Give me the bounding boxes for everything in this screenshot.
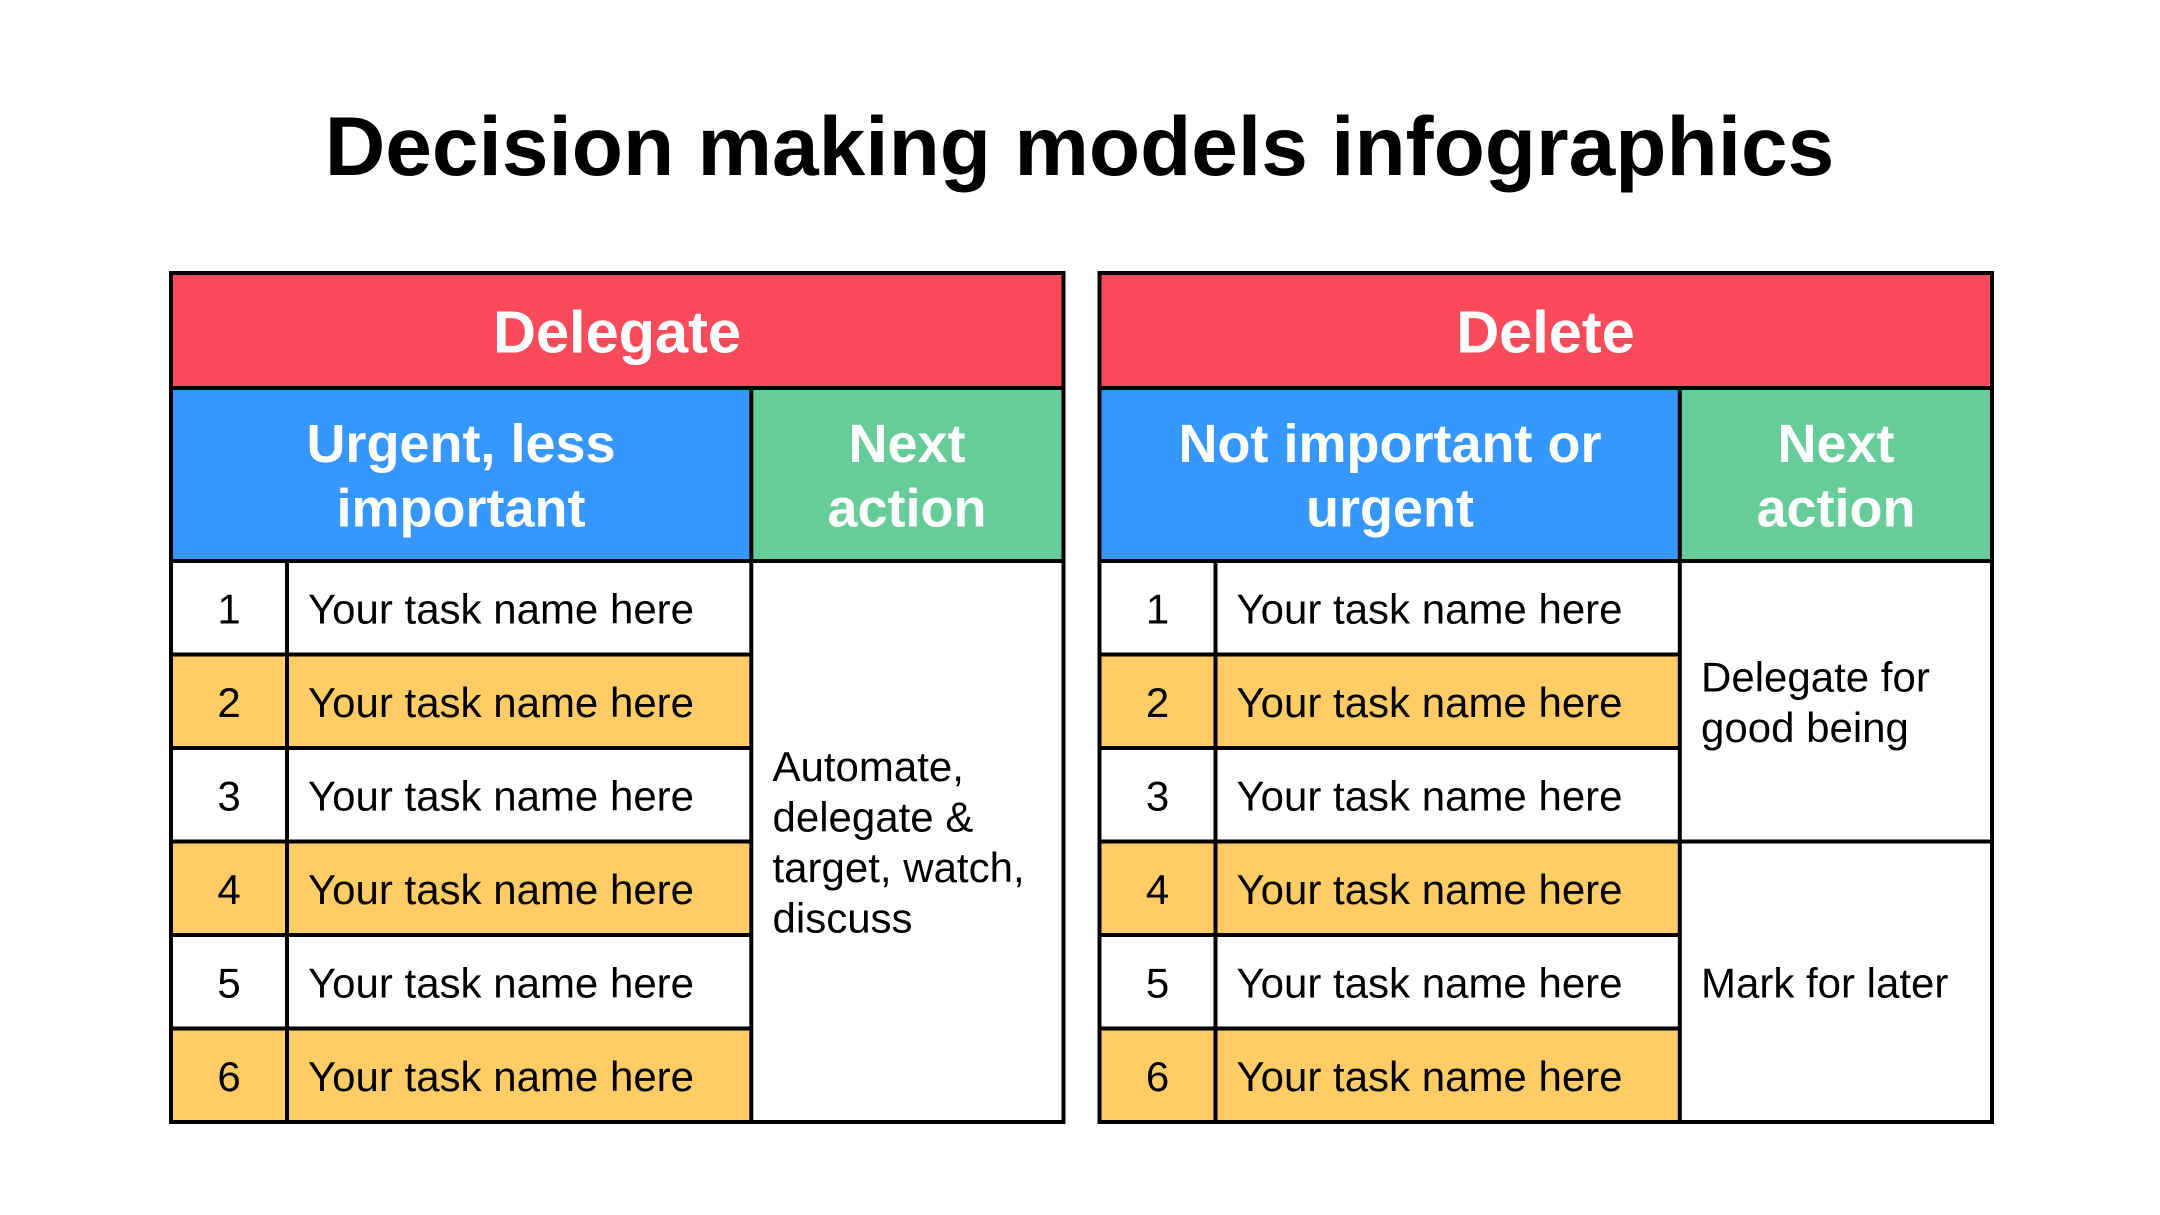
header: Delete (1100, 273, 1992, 388)
task row 3: Your task name here (1236, 772, 1623, 820)
task row 5 (1100, 935, 1680, 1028)
subheader: Next action (751, 388, 1064, 561)
next action text: target, watch, (772, 844, 1025, 891)
task row 3 (1100, 748, 1680, 842)
task row 4 (171, 842, 751, 935)
task row 3: Your task name here (308, 772, 694, 820)
task row 2: Your task name here (308, 679, 694, 726)
subheader: Not important or urgent (1100, 388, 1680, 561)
subheader: Next action: action (827, 478, 987, 538)
task row 3: 3 (217, 772, 241, 820)
task row 4: 4 (1146, 866, 1169, 913)
task row 6: Your task name here (1236, 1053, 1623, 1100)
subheader: Urgent, less important (171, 388, 751, 561)
task row 2 (1100, 654, 1680, 748)
next action: delegate for good being (1701, 654, 1930, 751)
task row 4 (1100, 842, 1680, 935)
next action: delegate for good being: good being (1701, 704, 1909, 751)
next action text (772, 743, 1025, 942)
header: Delete: Delete (1456, 298, 1635, 366)
panel: delegate table (171, 273, 1064, 1122)
task row 1: 1 (217, 586, 241, 632)
header: Delegate (171, 273, 1064, 388)
subheader: Next action: Next (848, 414, 966, 474)
task row 5: Your task name here (1236, 960, 1623, 1006)
task row 1: 1 (1146, 586, 1169, 632)
task row 6: 6 (1146, 1053, 1169, 1100)
subheader: Next action: action (1756, 478, 1916, 538)
task row 3: 3 (1146, 772, 1169, 820)
table grid lines (171, 273, 1064, 1122)
task row 6: 6 (217, 1053, 241, 1100)
next action: mark for later: Mark for later (1701, 960, 1948, 1006)
panel: delete table (1100, 273, 1992, 1122)
task row 1: Your task name here (308, 586, 694, 632)
task row 5: 5 (217, 960, 241, 1006)
task row 2 (171, 654, 751, 748)
task row 4: Your task name here (308, 866, 694, 913)
task row 6 (171, 1028, 751, 1122)
subheader: Next action (1680, 388, 1992, 561)
subheader: Urgent, less important: important (336, 478, 586, 538)
task row 5: Your task name here (308, 960, 694, 1006)
header: Delegate: Delegate (493, 298, 741, 366)
task row 4: Your task name here (1236, 866, 1623, 913)
title: Decision making models infographics (325, 99, 1834, 193)
next action text: Automate, (772, 743, 964, 790)
task row 1: Your task name here (1236, 586, 1623, 632)
table grid lines (1100, 273, 1992, 1122)
task row 2: 2 (1146, 679, 1169, 726)
task row 1 (1100, 561, 1680, 654)
next action: delegate for good being: Delegate for (1701, 654, 1930, 700)
task row 6 (1100, 1028, 1680, 1122)
subheader: Urgent, less important: Urgent, less (306, 414, 616, 474)
task row 6: Your task name here (308, 1053, 694, 1100)
subheader: Next action: Next (1777, 414, 1895, 474)
task row 5: 5 (1146, 960, 1169, 1006)
task row 2: Your task name here (1236, 679, 1623, 726)
task row 3 (171, 748, 751, 842)
task row 2: 2 (217, 679, 241, 726)
subheader: Not important or urgent: Not important or (1179, 414, 1601, 474)
subheader: Not important or urgent: urgent (1306, 478, 1474, 538)
task row 4: 4 (217, 866, 241, 913)
task row 5 (171, 935, 751, 1028)
next action text: discuss (772, 894, 913, 942)
next action text: delegate & (772, 794, 973, 840)
task row 1 (171, 561, 751, 654)
